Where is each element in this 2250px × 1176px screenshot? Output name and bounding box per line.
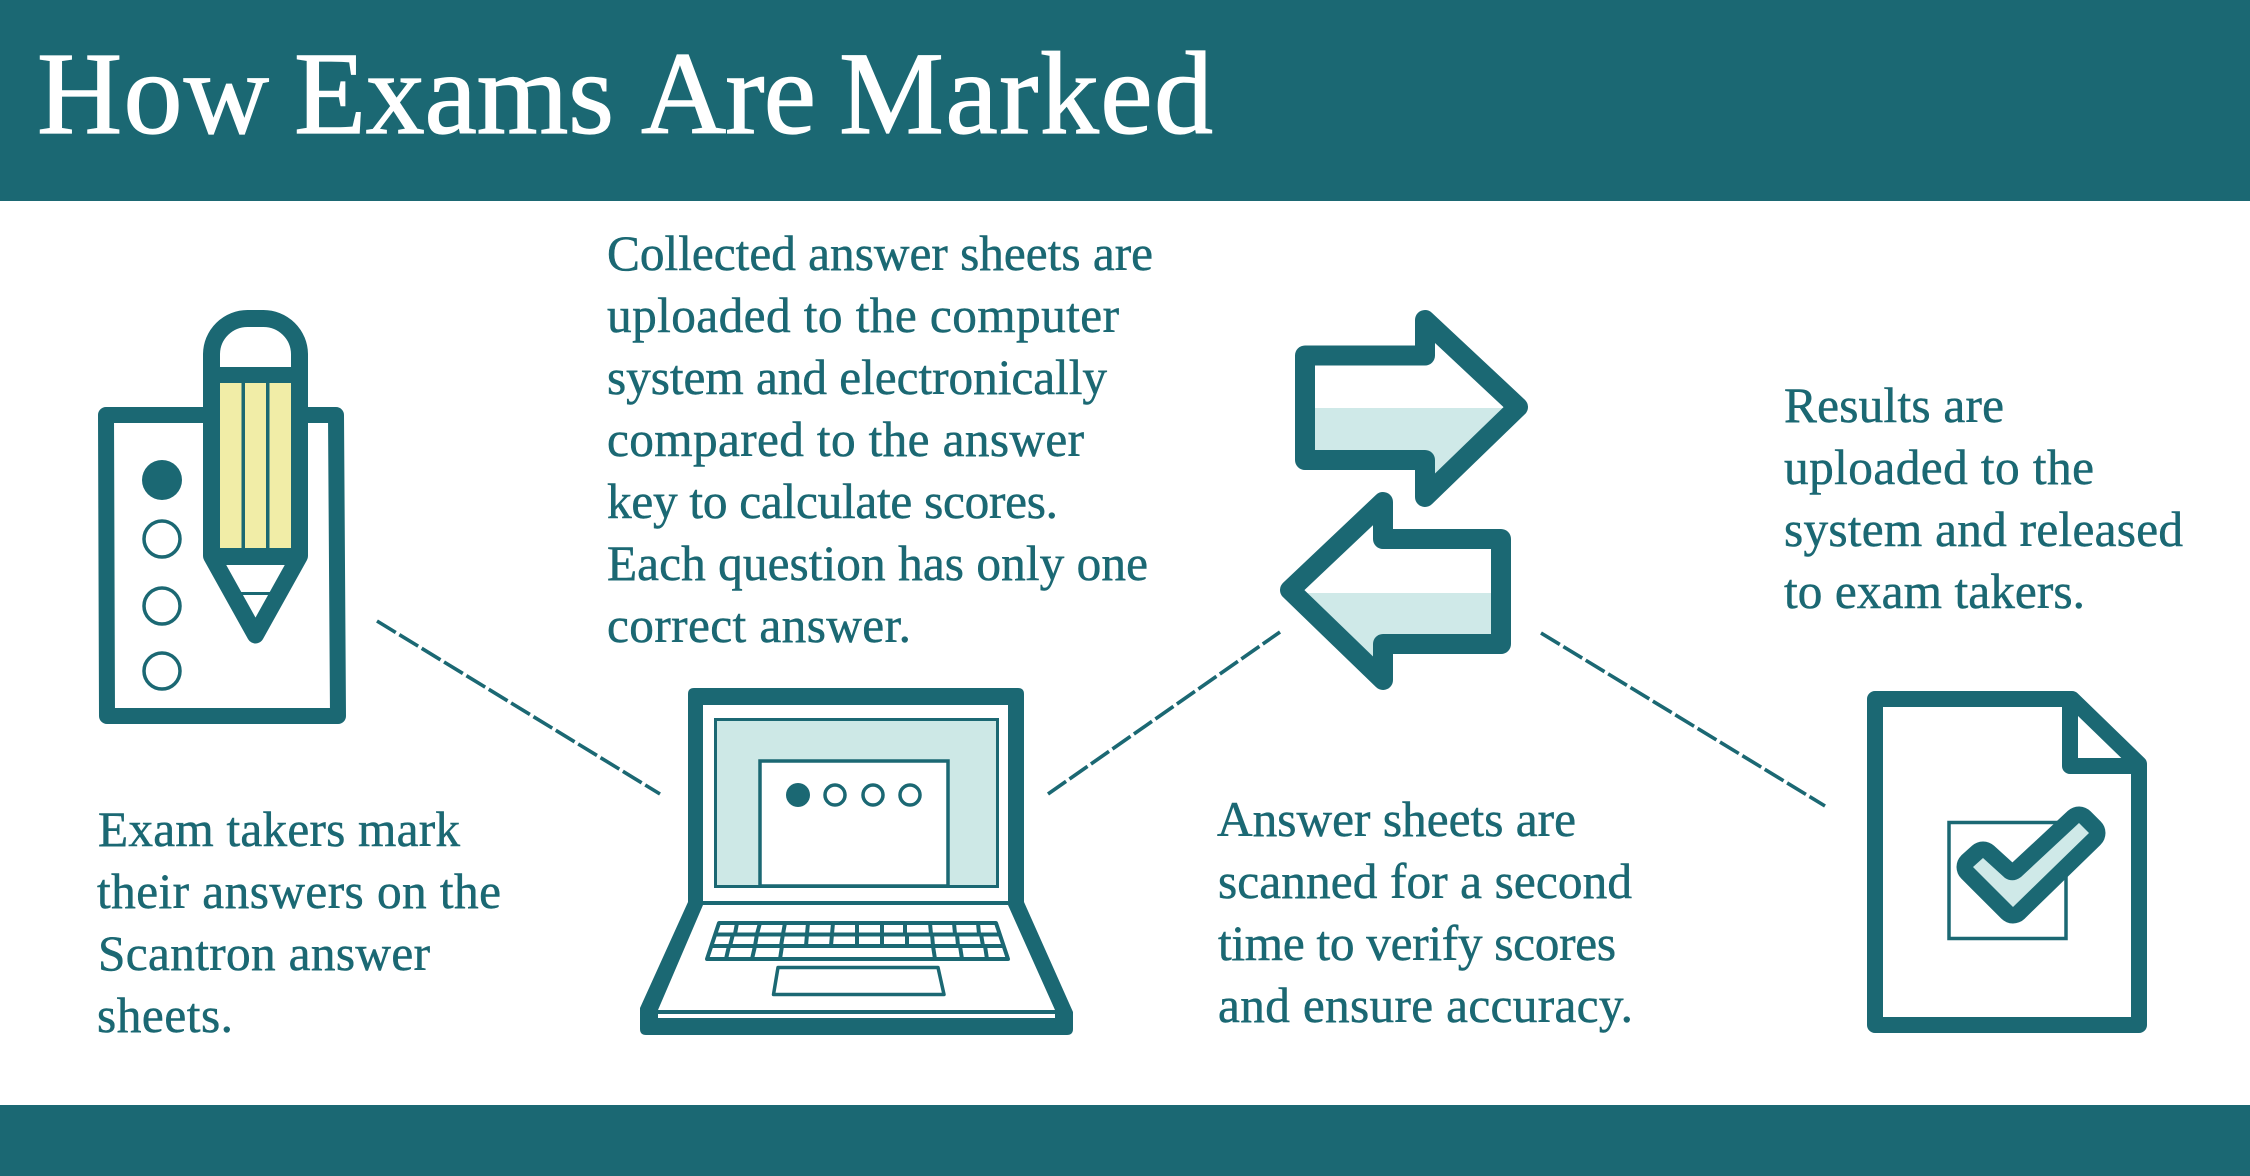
text: step 2: system and electronically xyxy=(607,350,1107,405)
text: step 2: Collected answer sheets are xyxy=(607,226,1153,281)
title: Exams xyxy=(294,28,614,159)
title: How xyxy=(37,28,269,159)
text: step 3 xyxy=(1217,792,1633,1033)
title: Marked xyxy=(839,28,1213,159)
title: Are xyxy=(641,28,816,159)
laptop trackpad xyxy=(774,968,944,994)
text: step 4: system and released xyxy=(1784,502,2183,557)
text: step 4 xyxy=(1784,378,2183,619)
icon: exchange arrows xyxy=(1290,320,1518,680)
title xyxy=(37,28,1213,159)
text: step 4: to exam takers. xyxy=(1784,564,2085,619)
footer band xyxy=(0,1105,2250,1176)
text: step 2: key to calculate scores. xyxy=(607,474,1058,529)
text: step 3: Answer sheets are xyxy=(1217,792,1576,847)
text: step 4: Results are xyxy=(1784,378,2004,433)
icon: answer sheet and pencil xyxy=(106,318,338,716)
text: step 1: sheets. xyxy=(97,988,233,1043)
text: step 1 xyxy=(97,802,501,1043)
laptop keyboard xyxy=(707,923,1008,959)
text: step 1: their answers on the xyxy=(97,864,501,919)
text: step 2: Each question has only one xyxy=(607,536,1148,591)
text: step 3: and ensure accuracy. xyxy=(1218,978,1633,1033)
icon: laptop xyxy=(640,688,1073,1035)
text: step 3: time to verify scores xyxy=(1218,916,1616,971)
header band xyxy=(0,0,2250,201)
icon: results document with check mark xyxy=(1875,699,2139,1025)
laptop screen xyxy=(716,720,998,886)
text: step 2: correct answer. xyxy=(607,598,911,653)
text: step 2 xyxy=(607,226,1153,653)
text: step 1: Exam takers mark xyxy=(98,802,460,857)
dashed connector: arrows to results xyxy=(1541,633,1825,806)
dashed connector: sheet to laptop xyxy=(377,621,660,794)
text: step 1: Scantron answer xyxy=(98,926,430,981)
text: step 4: uploaded to the xyxy=(1784,440,2094,495)
text: step 2: uploaded to the computer xyxy=(607,288,1119,343)
text: step 3: scanned for a second xyxy=(1218,854,1632,909)
dashed connector: laptop to arrows xyxy=(1048,632,1280,794)
text: step 2: compared to the answer xyxy=(607,412,1084,467)
